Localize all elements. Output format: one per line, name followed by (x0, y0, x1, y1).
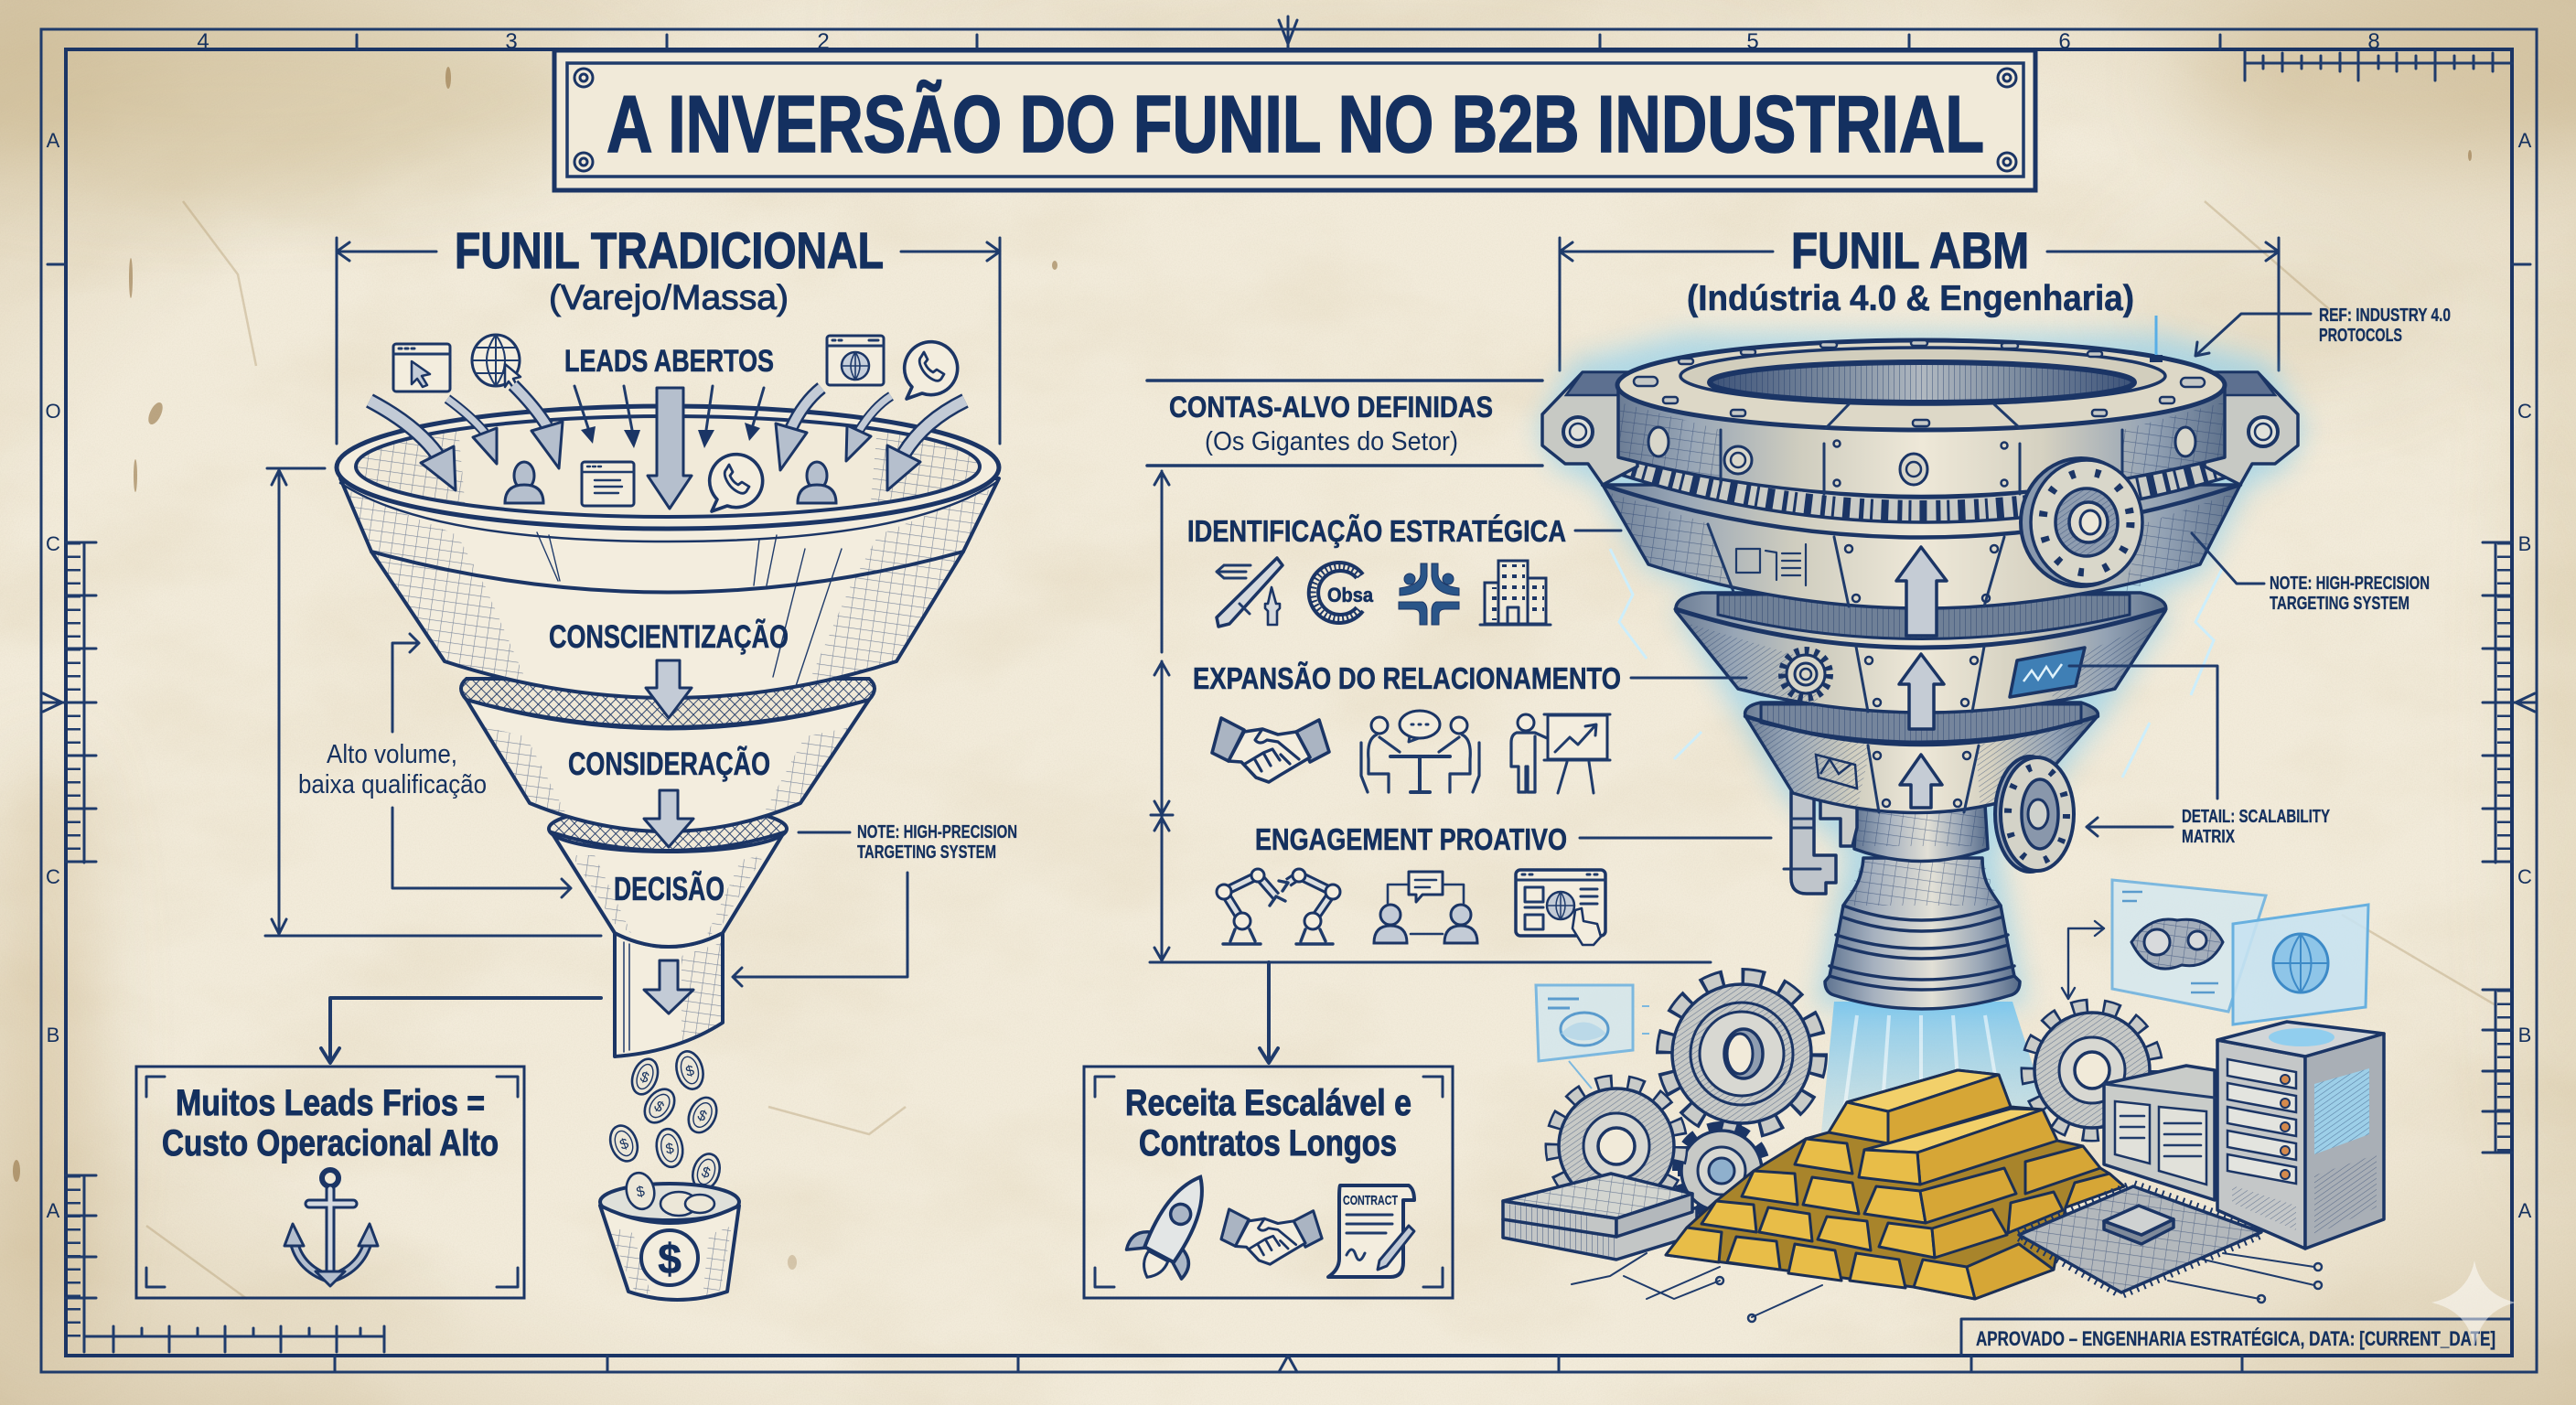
icon: handshake revenue (1221, 1209, 1322, 1264)
heading: funil tradicional: (Varejo/Massa) (549, 279, 789, 317)
icon: meeting table (1361, 711, 1479, 792)
pipe (1784, 791, 1857, 894)
blueprint frame: 8 (2367, 29, 2380, 54)
arrow: funnel to cold leads (321, 998, 601, 1063)
blueprint frame: B (47, 1024, 59, 1046)
stage: engagement proativo (1217, 822, 1771, 945)
funnel rim (337, 406, 999, 542)
icon: industrial symbol (1399, 563, 1459, 625)
lightning arcs (1610, 549, 2223, 778)
panel: revenue: Receita Escalável e (1125, 1083, 1411, 1123)
icon: browser globe (827, 336, 884, 385)
blueprint frame: B (2518, 532, 2531, 555)
gears (1552, 977, 2156, 1215)
gear: lower left (1552, 1082, 1680, 1210)
arrow: consideração to decisão (644, 790, 693, 847)
icon: globe cursor (472, 335, 521, 389)
bracket: alto volume (298, 634, 571, 897)
note: left funnel (733, 822, 1017, 986)
falling coins: $ (651, 1099, 667, 1116)
blueprint frame: C (2517, 865, 2532, 888)
falling coins: $ (617, 1136, 631, 1153)
note: scalability matrix (2069, 666, 2330, 847)
upper section (1603, 485, 2240, 636)
gold: third tier (1742, 1168, 2124, 1233)
middle section (1676, 593, 2166, 713)
server rack (2217, 1022, 2384, 1249)
bracket arrow to screens (2062, 921, 2104, 999)
dimension: funnel height (265, 468, 601, 936)
stage: conscientização (340, 478, 999, 698)
energy beam (1816, 1002, 2072, 1189)
blueprint frame: 5 (1746, 29, 1759, 54)
blueprint frame: C (46, 865, 60, 888)
holographic screen: left (1536, 985, 1649, 1089)
stage: engagement proativo: ENGAGEMENT PROATIVO (1255, 822, 1567, 856)
side ears (1542, 372, 2298, 485)
lower section (1745, 702, 2098, 812)
icon: anchor (284, 1170, 378, 1286)
title text: A INVERSÃO DO FUNIL NO B2B INDUSTRIAL (606, 79, 1984, 169)
blueprint frame: A (2518, 1199, 2532, 1222)
blueprint frame: A (2518, 129, 2532, 152)
icon: browser document (582, 462, 634, 506)
lower wheel (1995, 756, 2074, 872)
gold: fourth tier (1701, 1201, 2007, 1258)
stage: decisão: DECISÃO (614, 869, 724, 907)
stage: identificação estratégica: IDENTIFICAÇÃO ESTRATÉGICA (1187, 514, 1566, 548)
machine: abm funnel (1542, 316, 2298, 1009)
arrow: conscientização to consideração (646, 660, 692, 718)
falling coins (606, 1048, 724, 1193)
blueprint frame: C (2517, 400, 2532, 423)
stage: consideração (467, 700, 869, 831)
back server (2104, 1066, 2215, 1200)
panel: cold leads (136, 1067, 524, 1298)
label: contas-alvo: (Os Gigantes do Setor) (1205, 427, 1458, 456)
glow behind machine (1537, 334, 2305, 1006)
label: contas-alvo (1147, 381, 1542, 466)
falling coins: $ (695, 1108, 709, 1125)
icon: browser cursor (393, 344, 450, 391)
traditional funnel (337, 406, 999, 1056)
stage: identificação estratégica (1187, 514, 1621, 627)
note: scalability matrix: MATRIX (2182, 827, 2236, 847)
blueprint frame: A (47, 1199, 60, 1222)
circuit board (2019, 1186, 2261, 1292)
neck ring (1854, 805, 1988, 862)
heading: funil tradicional: FUNIL TRADICIONAL (455, 221, 884, 279)
approval stamp (1961, 1319, 2512, 1356)
icon: contract: CONTRACT (1343, 1193, 1398, 1208)
stage: decisão (552, 832, 784, 947)
blueprint frame: B (2518, 1024, 2531, 1046)
title plate (554, 50, 2035, 190)
icon: contract (1328, 1185, 1414, 1277)
blueprint frame: 6 (2058, 29, 2071, 54)
gold stack (1666, 1070, 2124, 1299)
note: ref industry (2195, 306, 2451, 356)
note: ref industry: PROTOCOLS (2319, 326, 2402, 346)
icon: person left (505, 462, 543, 503)
note: scalability matrix: DETAIL: SCALABILITY (2182, 807, 2330, 827)
falling coins: $ (638, 1069, 651, 1087)
panel: revenue: Contratos Longos (1139, 1123, 1397, 1164)
icon: person right (798, 462, 836, 503)
heading: funil tradicional (337, 221, 1000, 444)
icon: building (1480, 561, 1551, 625)
holographic screen: engine (2112, 880, 2266, 1012)
icon: coin bucket (600, 1170, 739, 1300)
note: high precision right: TARGETING SYSTEM (2270, 594, 2410, 614)
side wheel (2021, 458, 2142, 586)
icon: whatsapp top (905, 342, 958, 399)
note: ref industry: REF: INDUSTRY 4.0 (2319, 306, 2451, 326)
top ring (1617, 316, 2225, 496)
heading: funil abm: (Indústria 4.0 & Engenharia) (1687, 279, 2134, 318)
icon: circular logo: Obsa (1327, 584, 1374, 606)
arrow: abm to revenue (1260, 962, 1278, 1063)
falling coins: $ (664, 1141, 675, 1158)
note: left funnel: TARGETING SYSTEM (857, 842, 996, 863)
gear: large left (1665, 977, 1819, 1131)
gear: right (2028, 1006, 2156, 1134)
holographic screen: globe (2233, 905, 2368, 1024)
circuit traces (1572, 1253, 2322, 1322)
icon: client conversation (1374, 872, 1477, 943)
note: high precision right: NOTE: HIGH-PRECISION (2270, 574, 2430, 594)
icon: coin bucket: $ (658, 1235, 682, 1282)
falling coins: $ (684, 1063, 696, 1080)
stage: conscientização: CONSCIENTIZAÇÃO (549, 619, 789, 655)
stage: expansão do relacionamento: EXPANSÃO DO RELACIONAMENTO (1193, 661, 1621, 695)
icon: coin bucket: $ (635, 1184, 647, 1201)
blueprint frame: 2 (817, 29, 830, 54)
blueprint frame: 4 (197, 29, 209, 54)
blueprint frame: A (47, 129, 60, 152)
gear: small (1678, 1127, 1766, 1215)
chip stacks (1503, 1174, 1697, 1260)
heading: funil abm: FUNIL ABM (1791, 221, 2029, 279)
gold: second tier (1795, 1109, 2100, 1194)
ribbed band (1624, 456, 2232, 522)
label: contas-alvo: CONTAS-ALVO DEFINIDAS (1169, 391, 1493, 424)
panel: cold leads: Muitos Leads Frios = (176, 1083, 485, 1123)
mesh ring (461, 679, 875, 728)
icon: engineering tools (1217, 558, 1283, 627)
leads label: LEADS ABERTOS (564, 344, 774, 379)
gold: bottom tier (1666, 1228, 2054, 1299)
stage: expansão do relacionamento (1193, 661, 1746, 793)
falling coins: $ (700, 1164, 712, 1182)
heading: funil abm (1560, 221, 2279, 370)
icon: web targeting (1516, 870, 1605, 945)
blueprint frame: O (45, 400, 61, 423)
stage arrows: bracket (1150, 471, 1711, 962)
icon: circular logo (1309, 563, 1374, 623)
nozzle (1825, 858, 2020, 1009)
funnel spout (615, 933, 723, 1056)
icon: handshake (1212, 718, 1329, 782)
icon: rocket (1119, 1162, 1229, 1292)
lower arrow (1899, 654, 1944, 729)
watermark star (2431, 1260, 2516, 1347)
blueprint frame: C (46, 532, 60, 555)
lead arrows (370, 385, 965, 509)
blueprint frame: 3 (505, 29, 518, 54)
gold: top bar (1829, 1070, 2011, 1143)
icon: whatsapp in funnel (710, 455, 763, 511)
bracket: alto volume: baixa qualificação (298, 770, 487, 799)
stage: consideração: CONSIDERAÇÃO (568, 746, 770, 782)
note: high precision right (2192, 533, 2430, 614)
panel: revenue (1084, 1067, 1453, 1298)
note: left funnel: NOTE: HIGH-PRECISION (857, 822, 1017, 842)
icon: robot arms (1217, 869, 1340, 944)
bracket: alto volume: Alto volume, (327, 740, 457, 769)
icon: presenter chart (1511, 714, 1610, 793)
panel: cold leads: Custo Operacional Alto (162, 1123, 499, 1164)
